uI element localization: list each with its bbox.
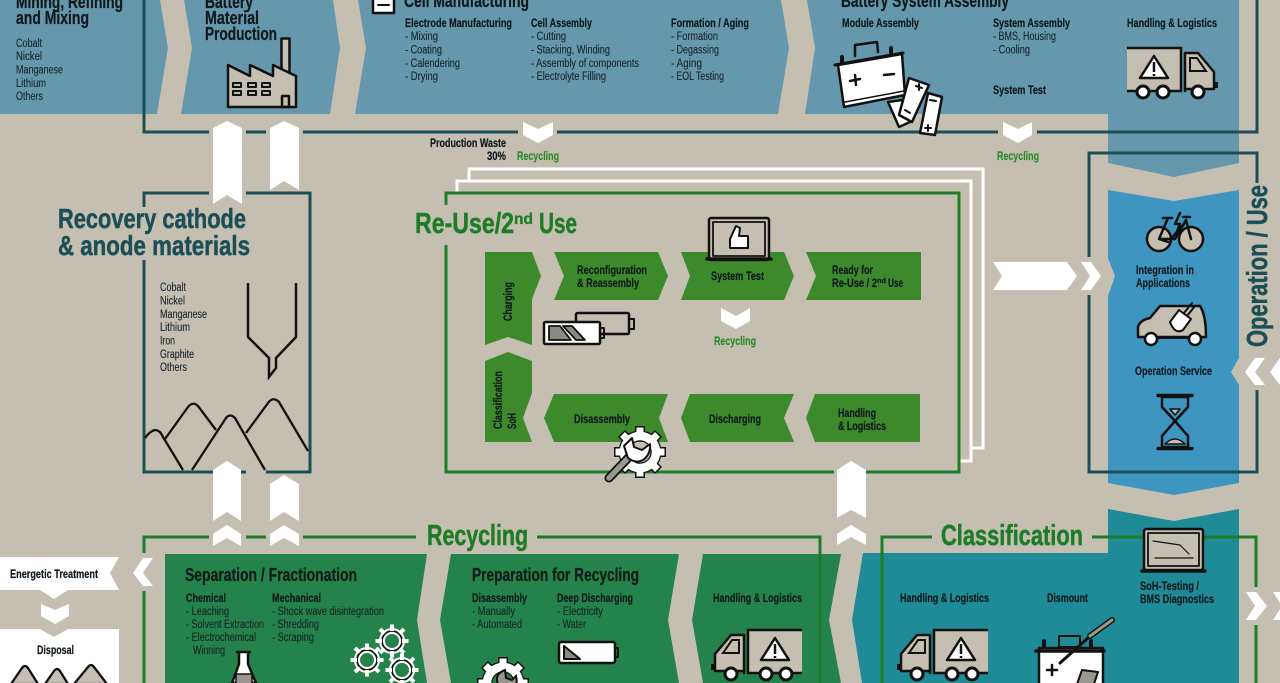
heading: mining	[16, 0, 123, 28]
list: formation and aging: - EOL Testing	[671, 71, 724, 83]
label: system test: System Test	[993, 85, 1046, 97]
panel: operation and use	[1089, 153, 1257, 495]
step: charging: Charging	[503, 282, 515, 321]
list: disassembly	[472, 593, 527, 631]
list: recovered materials: Nickel	[160, 296, 185, 308]
icon: laptop thumbs up	[707, 218, 771, 260]
step: discharging: Discharging	[709, 414, 761, 426]
step: ready for re-use	[806, 252, 921, 300]
label: integration in applications: Applications	[1136, 278, 1190, 290]
list: disassembly: Disassembly	[472, 593, 527, 605]
list: formation and aging: - Aging	[671, 58, 702, 70]
icon: gears	[350, 624, 418, 683]
arrow: classification return chevrons	[1246, 592, 1280, 620]
list: electrode manufacturing: Electrode Manufacturing	[405, 18, 512, 30]
heading: operation / use: Operation / Use	[1242, 185, 1274, 347]
step: ready for re-use: Re-Use / 2	[832, 278, 877, 290]
label: recycling: Recycling	[517, 151, 559, 163]
list: deep discharging: - Electricity	[557, 606, 603, 618]
arrow: second use to recycling	[721, 308, 750, 329]
list: formation and aging: Formation / Aging	[671, 18, 749, 30]
icon: dismounted battery	[1036, 620, 1112, 683]
icon: mountains	[145, 399, 308, 470]
label: soh testing: SoH-Testing /	[1140, 581, 1200, 593]
list: cell assembly: Cell Assembly	[531, 18, 592, 30]
icon: factory	[228, 38, 296, 107]
list: cell assembly: - Cutting	[531, 31, 566, 43]
icon: truck	[1127, 48, 1218, 98]
list: deep discharging	[557, 593, 633, 631]
list: system assembly: - Cooling	[993, 44, 1030, 56]
frame: operation	[1089, 153, 1257, 472]
list: raw materials: Manganese	[16, 64, 63, 76]
panel: cell manufacturing	[355, 0, 789, 114]
heading: recovery: & anode materials	[58, 230, 250, 261]
step: classification soh: Classification	[493, 371, 505, 429]
list: recovered materials: Graphite	[160, 349, 194, 361]
heading: mining: and Mixing	[16, 8, 89, 28]
heading: re-use / 2nd use: Use	[539, 208, 577, 240]
panel: classification	[852, 509, 1256, 683]
heading: recovery	[58, 203, 250, 261]
list: disassembly: - Automated	[472, 619, 522, 631]
heading: recovery: Recovery cathode	[58, 203, 246, 234]
icon: truck	[711, 630, 802, 680]
arrow: re-use to operation	[993, 262, 1077, 290]
step: charging	[485, 252, 541, 345]
list: cell assembly: - Electrolyte Filling	[531, 71, 606, 83]
label: module assembly: Module Assembly	[842, 18, 919, 30]
step: system test: System Test	[711, 271, 764, 283]
list: electrode manufacturing: - Drying	[405, 71, 438, 83]
arrow: recycling to recovery second	[270, 475, 299, 546]
list: recovered materials: Cobalt	[160, 282, 187, 294]
panel: re-use frame	[446, 193, 959, 472]
step: handling and logistics: Handling	[838, 408, 876, 420]
label: handling: Handling & Logistics	[900, 593, 989, 605]
list: system assembly	[993, 18, 1070, 56]
label: soh testing	[1140, 581, 1214, 606]
icon: module battery and cells	[835, 42, 942, 135]
step: reconfiguration and reassembly: Reconfiguration	[577, 265, 647, 277]
icon: laptop with curve	[1142, 529, 1205, 571]
heading: separation: Separation / Fractionation	[185, 565, 357, 585]
heading: re-use / 2nd use: nd	[514, 211, 533, 228]
panel: battery material production	[181, 0, 340, 114]
icon: charging batteries	[544, 313, 634, 344]
step: ready for re-use: Use	[888, 278, 903, 290]
list: deep discharging: Deep Discharging	[557, 593, 633, 605]
panel: separation and fractionation	[165, 554, 427, 683]
arrow: to disposal	[41, 604, 69, 624]
list: chemical	[186, 593, 264, 657]
arrow: to energetic treatment	[133, 558, 153, 586]
label: soh testing: BMS Diagnostics	[1140, 594, 1214, 606]
list: formation and aging: - Formation	[671, 31, 718, 43]
arrow: system chevron	[1003, 122, 1032, 143]
panel: recovery cathode and anode materials	[58, 193, 310, 472]
list: recovered materials	[160, 282, 207, 374]
step: discharging	[681, 394, 794, 442]
arrow: classification to re-use	[837, 461, 866, 545]
icon: gear and wrench	[477, 657, 529, 683]
icon: mountains	[11, 665, 107, 683]
step: classification soh	[485, 352, 532, 442]
heading: battery material production	[205, 0, 277, 44]
icon: hourglass	[1158, 396, 1192, 448]
list: system assembly: System Assembly	[993, 18, 1070, 30]
list: raw materials: Others	[16, 91, 43, 103]
list: recovered materials: Manganese	[160, 309, 207, 321]
icon: empty battery	[559, 642, 618, 663]
arrow: waste chevron	[523, 122, 553, 143]
arrow: service return chevrons	[1245, 358, 1280, 385]
list: recovered materials: Iron	[160, 336, 175, 348]
box: energetic treatment	[0, 557, 119, 599]
list: system assembly: - BMS, Housing	[993, 31, 1056, 43]
box: disposal: Disposal	[37, 645, 74, 657]
recycling frame	[144, 537, 820, 683]
list: electrode manufacturing	[405, 18, 512, 83]
heading: battery material production: Production	[205, 24, 277, 44]
production waste note: 30%	[487, 151, 506, 163]
list: cell assembly: - Stacking, Winding	[531, 44, 610, 56]
heading: preparation: Preparation for Recycling	[472, 565, 639, 585]
panel: re-use frames	[457, 169, 983, 461]
list: chemical: - Electrochemical	[186, 632, 256, 644]
step: ready for re-use: Ready for	[832, 265, 873, 277]
panel: preparation for recycling	[440, 554, 679, 683]
icon: e-bike	[1147, 213, 1203, 251]
arrow: re-use to operation chevron	[1081, 262, 1101, 290]
list: deep discharging: - Water	[557, 619, 586, 631]
list: mechanical	[272, 593, 384, 644]
step: reconfiguration and reassembly: & Reassembly	[577, 278, 639, 290]
list: electrode manufacturing: - Coating	[405, 44, 442, 56]
label: recycling system: Recycling	[997, 151, 1039, 163]
list: formation and aging: - Degassing	[671, 44, 719, 56]
step: disassembly	[544, 394, 668, 442]
frame: classification	[882, 537, 1256, 683]
list: electrode manufacturing: - Calendering	[405, 58, 460, 70]
heading: battery material production: Material	[205, 8, 259, 28]
step: ready for re-use: nd	[877, 278, 886, 285]
label: handling and logistics: Handling & Logistics	[1127, 18, 1217, 30]
icon: electric car	[1138, 303, 1206, 345]
box: energetic treatment: Energetic Treatment	[10, 569, 98, 581]
list: raw materials	[16, 38, 63, 103]
list: chemical: Winning	[193, 645, 225, 657]
panel: recycling handling and logistics	[692, 554, 841, 683]
production flow line	[144, 0, 1257, 132]
label: integration in applications	[1136, 265, 1194, 290]
list: mechanical: - Shredding	[272, 619, 319, 631]
icon: gear and wrench	[609, 426, 666, 478]
list: chemical: - Leaching	[186, 606, 229, 618]
list: mechanical: - Scraping	[272, 632, 314, 644]
heading: recycling: Recycling	[427, 520, 528, 552]
panel: mining, refining and mixing	[0, 0, 168, 114]
step: reconfiguration and reassembly	[554, 252, 668, 300]
list: raw materials: Lithium	[16, 78, 46, 90]
arrow: recovery to material production second	[270, 121, 299, 190]
list: formation and aging	[671, 18, 749, 83]
label: operation service: Operation Service	[1135, 366, 1212, 378]
icon: truck	[897, 630, 988, 680]
list: cell assembly	[531, 18, 639, 83]
step: handling and logistics	[806, 394, 920, 442]
heading: classification: Classification	[941, 520, 1083, 552]
step: classification soh: SoH	[507, 413, 519, 429]
step: system test	[681, 252, 794, 300]
list: chemical: Chemical	[186, 593, 226, 605]
panel: battery system assembly	[805, 0, 1239, 177]
arrow: recycling to recovery	[213, 461, 241, 546]
label: dismount: Dismount	[1047, 593, 1088, 605]
label: recycling second use: Recycling	[714, 336, 756, 348]
icon: funnel	[248, 283, 296, 377]
label: handling: Handling & Logistics	[713, 593, 802, 605]
production waste note	[430, 138, 506, 163]
list: electrode manufacturing: - Mixing	[405, 31, 438, 43]
step: handling and logistics: & Logistics	[838, 421, 886, 433]
list: recovered materials: Lithium	[160, 322, 190, 334]
icon: flask	[232, 652, 256, 683]
list: raw materials: Nickel	[16, 51, 42, 63]
list: disassembly: - Manually	[472, 606, 515, 618]
step: disassembly: Disassembly	[574, 414, 630, 426]
list: cell assembly: - Assembly of components	[531, 58, 639, 70]
production waste note: Production Waste	[430, 138, 506, 150]
list: chemical: - Solvent Extraction	[186, 619, 264, 631]
box: disposal	[0, 629, 119, 683]
label: integration in applications: Integration in	[1136, 265, 1194, 277]
arrow: recovery to material production	[213, 121, 242, 204]
list: mechanical: Mechanical	[272, 593, 321, 605]
list: raw materials: Cobalt	[16, 38, 43, 50]
heading: re-use / 2nd use: Re-Use/2	[415, 208, 514, 240]
list: recovered materials: Others	[160, 362, 187, 374]
icon: cell	[373, 0, 394, 13]
list: mechanical: - Shock wave disintegration	[272, 606, 384, 618]
